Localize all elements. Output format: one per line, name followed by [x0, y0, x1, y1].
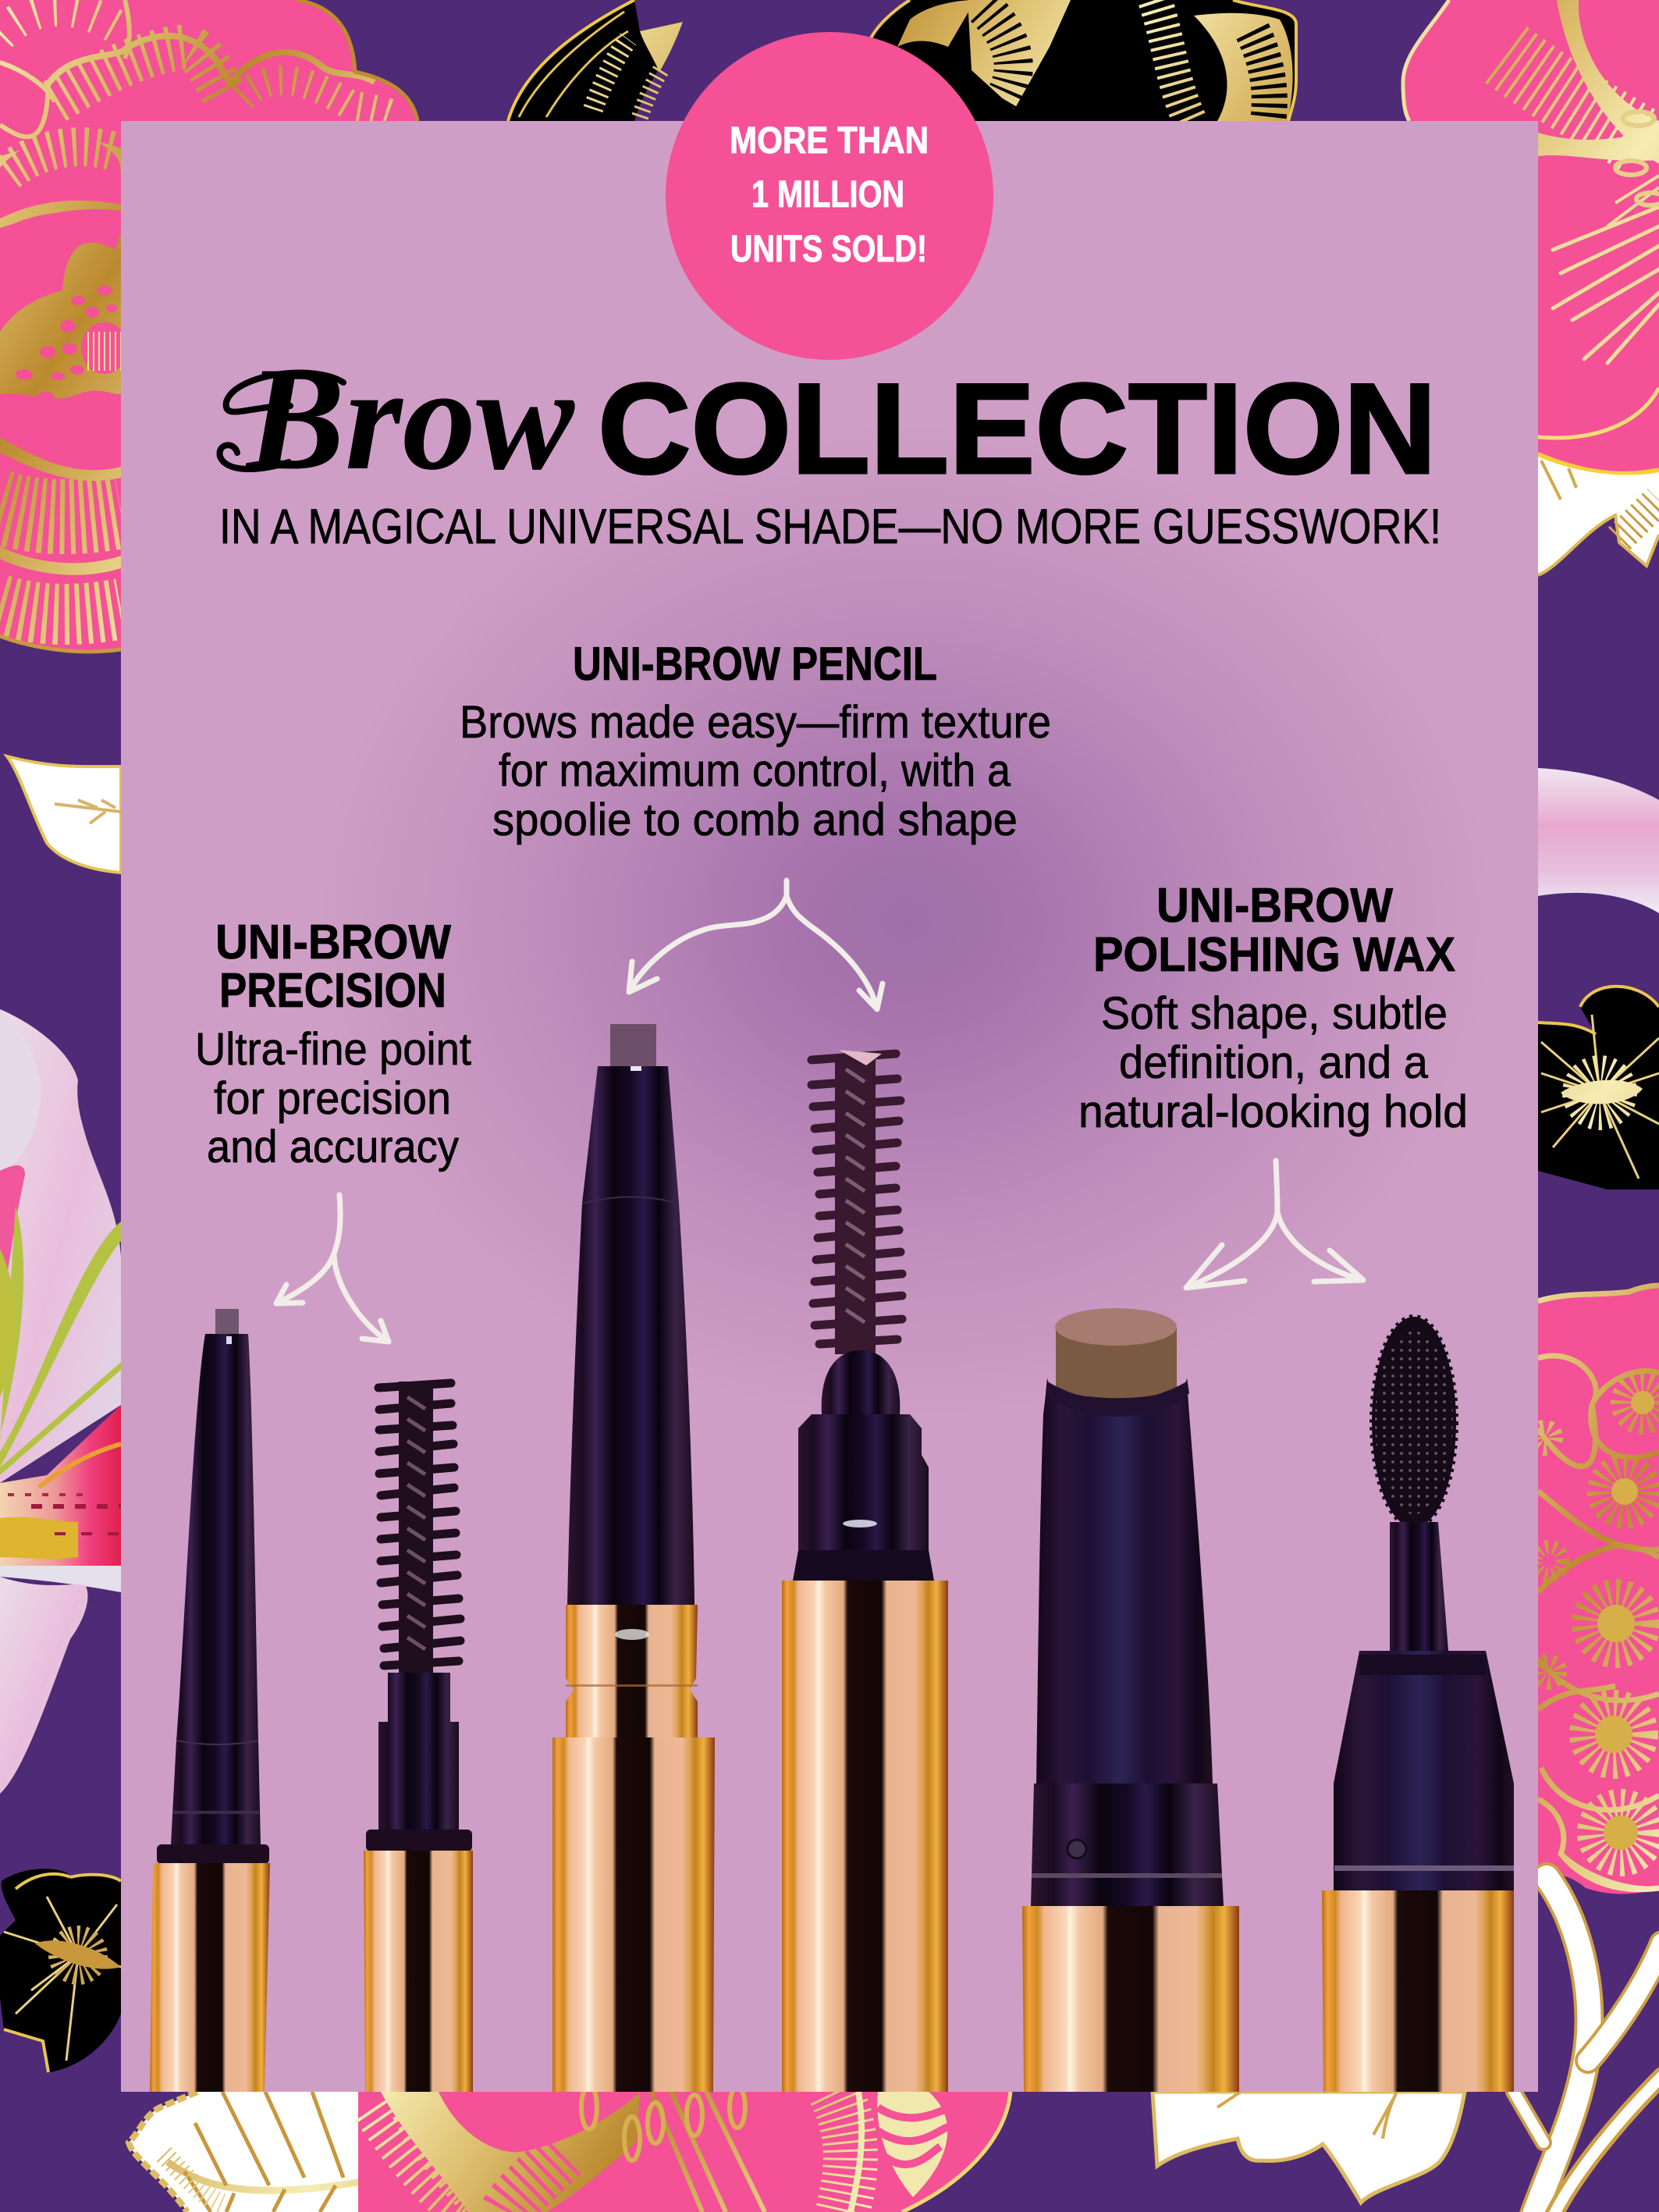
text block: Uni-Brow Polishing Wax: Soft shape, subtle — [1101, 988, 1448, 1039]
text block: Uni-Brow Precision: PRECISION — [219, 964, 446, 1018]
text block: Uni-Brow Precision: for precision — [214, 1073, 451, 1124]
panel: lilac backdrop — [121, 121, 1538, 2092]
leaf: bottom-left white and gold — [129, 2092, 371, 2212]
text block: Uni-Brow Precision: UNI-BROW — [215, 916, 451, 969]
text block: Uni-Brow Pencil: UNI-BROW PENCIL — [573, 638, 937, 690]
product: wax brush — [1322, 1317, 1514, 2092]
text block: Uni-Brow Polishing Wax — [1078, 879, 1468, 1137]
badge: more than 1 million units sold: UNITS SOLD! — [730, 229, 927, 270]
flower: right pink and gold cluster — [1534, 1286, 1659, 1894]
flower: top-right pink and gold — [1403, 0, 1659, 474]
subtitle: IN A MAGICAL UNIVERSAL SHADE—NO MORE GUESSWORK! — [219, 500, 1441, 554]
product: large pencil — [552, 1024, 715, 2092]
title: Brow Collection — [220, 337, 1437, 501]
text block: Uni-Brow Pencil: for maximum control, with a — [499, 745, 1011, 796]
badge: more than 1 million units sold — [666, 32, 993, 360]
text block: Uni-Brow Pencil: spoolie to comb and shape — [492, 795, 1018, 845]
text block: Uni-Brow Polishing Wax: natural-looking hold — [1078, 1086, 1468, 1137]
leaf: right white — [1538, 457, 1659, 575]
leaf: top black and gold — [508, 0, 683, 121]
text block: Uni-Brow Pencil: Brows made easy—firm texture — [460, 697, 1051, 748]
product: large spoolie — [782, 1050, 948, 2092]
flower: top-left pink and gold — [0, 0, 417, 652]
product: small pencil — [150, 1309, 270, 2092]
flower: lower-left black and gold pansy — [0, 1869, 121, 2072]
petal: right pale lily — [1538, 768, 1659, 913]
text block: Uni-Brow Pencil — [460, 638, 1051, 845]
title: Brow Collection: Brow — [245, 337, 575, 501]
text block: Uni-Brow Precision: and accuracy — [207, 1122, 459, 1172]
flower: right black and gold pansy — [1538, 987, 1659, 1190]
text block: Uni-Brow Precision: Ultra-fine point — [195, 1024, 471, 1075]
text block: Uni-Brow Polishing Wax: POLISHING WAX — [1093, 928, 1455, 982]
arrow: precision fork — [276, 1195, 389, 1342]
text block: Uni-Brow Polishing Wax: definition, and a — [1119, 1037, 1429, 1088]
flower: bottom pink and gold — [358, 2086, 1011, 2212]
product: wax stick — [1022, 1308, 1239, 2092]
text block: Uni-Brow Precision — [195, 916, 471, 1172]
flower: left pink lily — [0, 1009, 121, 1794]
product: small spoolie — [364, 1382, 473, 2092]
flower: top black and gold — [870, 0, 1296, 121]
title: Brow Collection: COLLECTION — [598, 357, 1437, 500]
text block: Uni-Brow Polishing Wax: UNI-BROW — [1156, 879, 1393, 933]
stems: lower-right white branches — [1514, 1877, 1659, 2212]
arrow: pencil fork — [629, 880, 883, 1009]
badge: more than 1 million units sold: 1 MILLION — [751, 174, 904, 215]
petal: bottom white — [1153, 2092, 1465, 2203]
flower: left white leaf — [7, 756, 121, 873]
arrow: wax fork — [1186, 1161, 1363, 1288]
badge: more than 1 million units sold: MORE THAN — [730, 120, 929, 162]
